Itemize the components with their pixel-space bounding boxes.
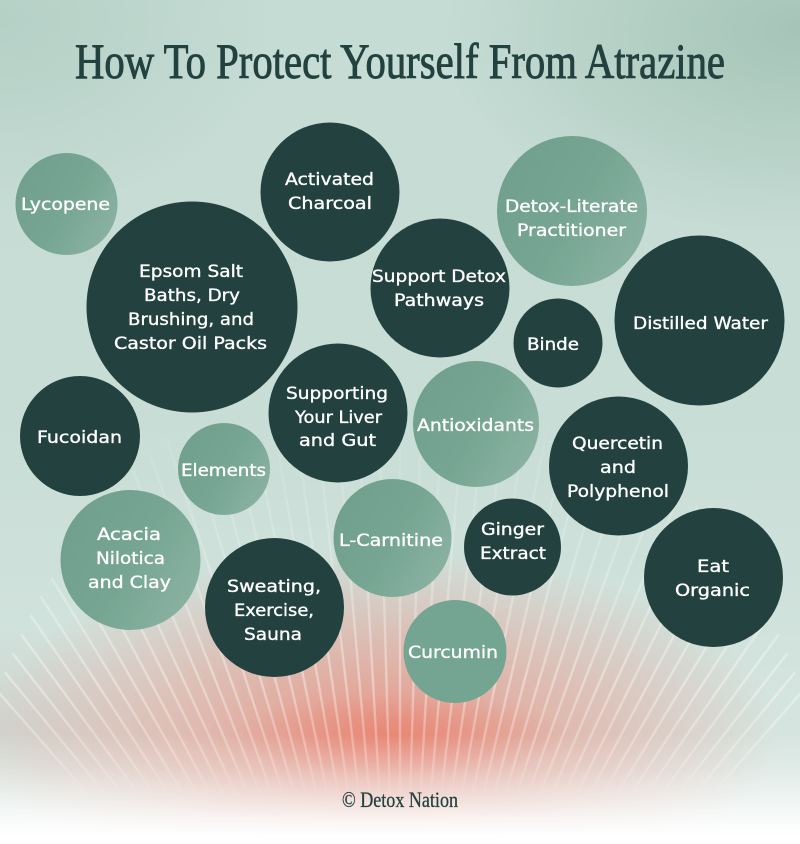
footer logo: Detox Nation: © Detox Nation bbox=[342, 787, 458, 812]
bubble: Supporting Your Liver and Gut: Supporting bbox=[286, 384, 388, 404]
bubble: Detox-Literate Practitioner: Detox-Literate bbox=[505, 197, 638, 217]
bubble: Distilled Water: Distilled Water bbox=[633, 314, 768, 334]
bubble: Binde: Binde bbox=[527, 335, 579, 355]
bubble: Fucoidan bbox=[20, 376, 140, 496]
bubble: Detox-Literate Practitioner: Practitioner bbox=[517, 221, 626, 241]
bubble: Quercetin and Polyphenol: and bbox=[600, 458, 636, 478]
bubble: Acacia Nilotica and Clay: Nilotica bbox=[96, 549, 165, 569]
bubble: L-Carnitine: L-Carnitine bbox=[339, 531, 443, 551]
bubble: Sweating, Exercise, Sauna: Sauna bbox=[244, 625, 302, 645]
bubble: L-Carnitine bbox=[334, 479, 452, 597]
bubble: Activated Charcoal: Charcoal bbox=[288, 194, 372, 214]
bubble: Antioxidants bbox=[413, 361, 539, 487]
bubble: Acacia Nilotica and Clay bbox=[60, 490, 200, 630]
bubble: Supporting Your Liver and Gut bbox=[268, 344, 408, 482]
bubble: Epsom Salt Baths, Dry Brushing, and Castor Oil Packs: Baths, Dry bbox=[144, 286, 240, 306]
bubble: Supporting Your Liver and Gut: and Gut bbox=[299, 431, 376, 451]
bubble: Supporting Your Liver and Gut: Your Liver bbox=[294, 408, 382, 428]
bubble: Fucoidan: Fucoidan bbox=[37, 428, 122, 448]
bubble: Eat Organic: Organic bbox=[675, 581, 750, 601]
bubble: Activated Charcoal: Activated bbox=[285, 170, 374, 190]
bubble: Quercetin and Polyphenol bbox=[549, 396, 688, 536]
bubble: Lycopene bbox=[16, 153, 118, 255]
bubble: Epsom Salt Baths, Dry Brushing, and Castor Oil Packs bbox=[86, 202, 298, 412]
bubble: Curcumin: Curcumin bbox=[408, 643, 498, 663]
bubble: Binde bbox=[514, 298, 602, 388]
bubble: Sweating, Exercise, Sauna: Sweating, bbox=[227, 577, 321, 597]
bubble: Support Detox Pathways bbox=[370, 218, 510, 358]
bubble: Distilled Water bbox=[614, 236, 784, 406]
bubble: Detox-Literate Practitioner bbox=[497, 136, 647, 286]
bubble: Ginger Extract: Ginger bbox=[481, 520, 544, 540]
bubble: Lycopene: Lycopene bbox=[21, 195, 110, 215]
bubble: Quercetin and Polyphenol: Polyphenol bbox=[567, 482, 669, 502]
bubble: Epsom Salt Baths, Dry Brushing, and Castor Oil Packs: Brushing, and bbox=[128, 310, 254, 330]
bubble: Acacia Nilotica and Clay: and Clay bbox=[88, 573, 171, 593]
bubble: Acacia Nilotica and Clay: Acacia bbox=[97, 525, 161, 545]
bubble: Sweating, Exercise, Sauna: Exercise, bbox=[234, 601, 314, 621]
bubble: Ginger Extract bbox=[464, 498, 561, 596]
bubble: Curcumin bbox=[404, 600, 506, 703]
bubble: Epsom Salt Baths, Dry Brushing, and Castor Oil Packs: Castor Oil Packs bbox=[114, 334, 267, 354]
bubble: Elements bbox=[178, 423, 270, 515]
bubble: Antioxidants: Antioxidants bbox=[417, 416, 534, 436]
bubble: Activated Charcoal bbox=[260, 122, 400, 262]
bubble: Quercetin and Polyphenol: Quercetin bbox=[572, 434, 663, 454]
bubble: Support Detox Pathways: Pathways bbox=[394, 291, 484, 311]
bubble: Eat Organic: Eat bbox=[697, 557, 729, 577]
bubble: Ginger Extract: Extract bbox=[480, 544, 546, 564]
bubble: Eat Organic bbox=[644, 508, 783, 647]
bubble: Elements: Elements bbox=[181, 461, 266, 481]
bubble: Epsom Salt Baths, Dry Brushing, and Castor Oil Packs: Epsom Salt bbox=[139, 262, 243, 282]
bubble: Support Detox Pathways: Support Detox bbox=[372, 267, 506, 287]
bubble: Sweating, Exercise, Sauna bbox=[205, 538, 344, 677]
